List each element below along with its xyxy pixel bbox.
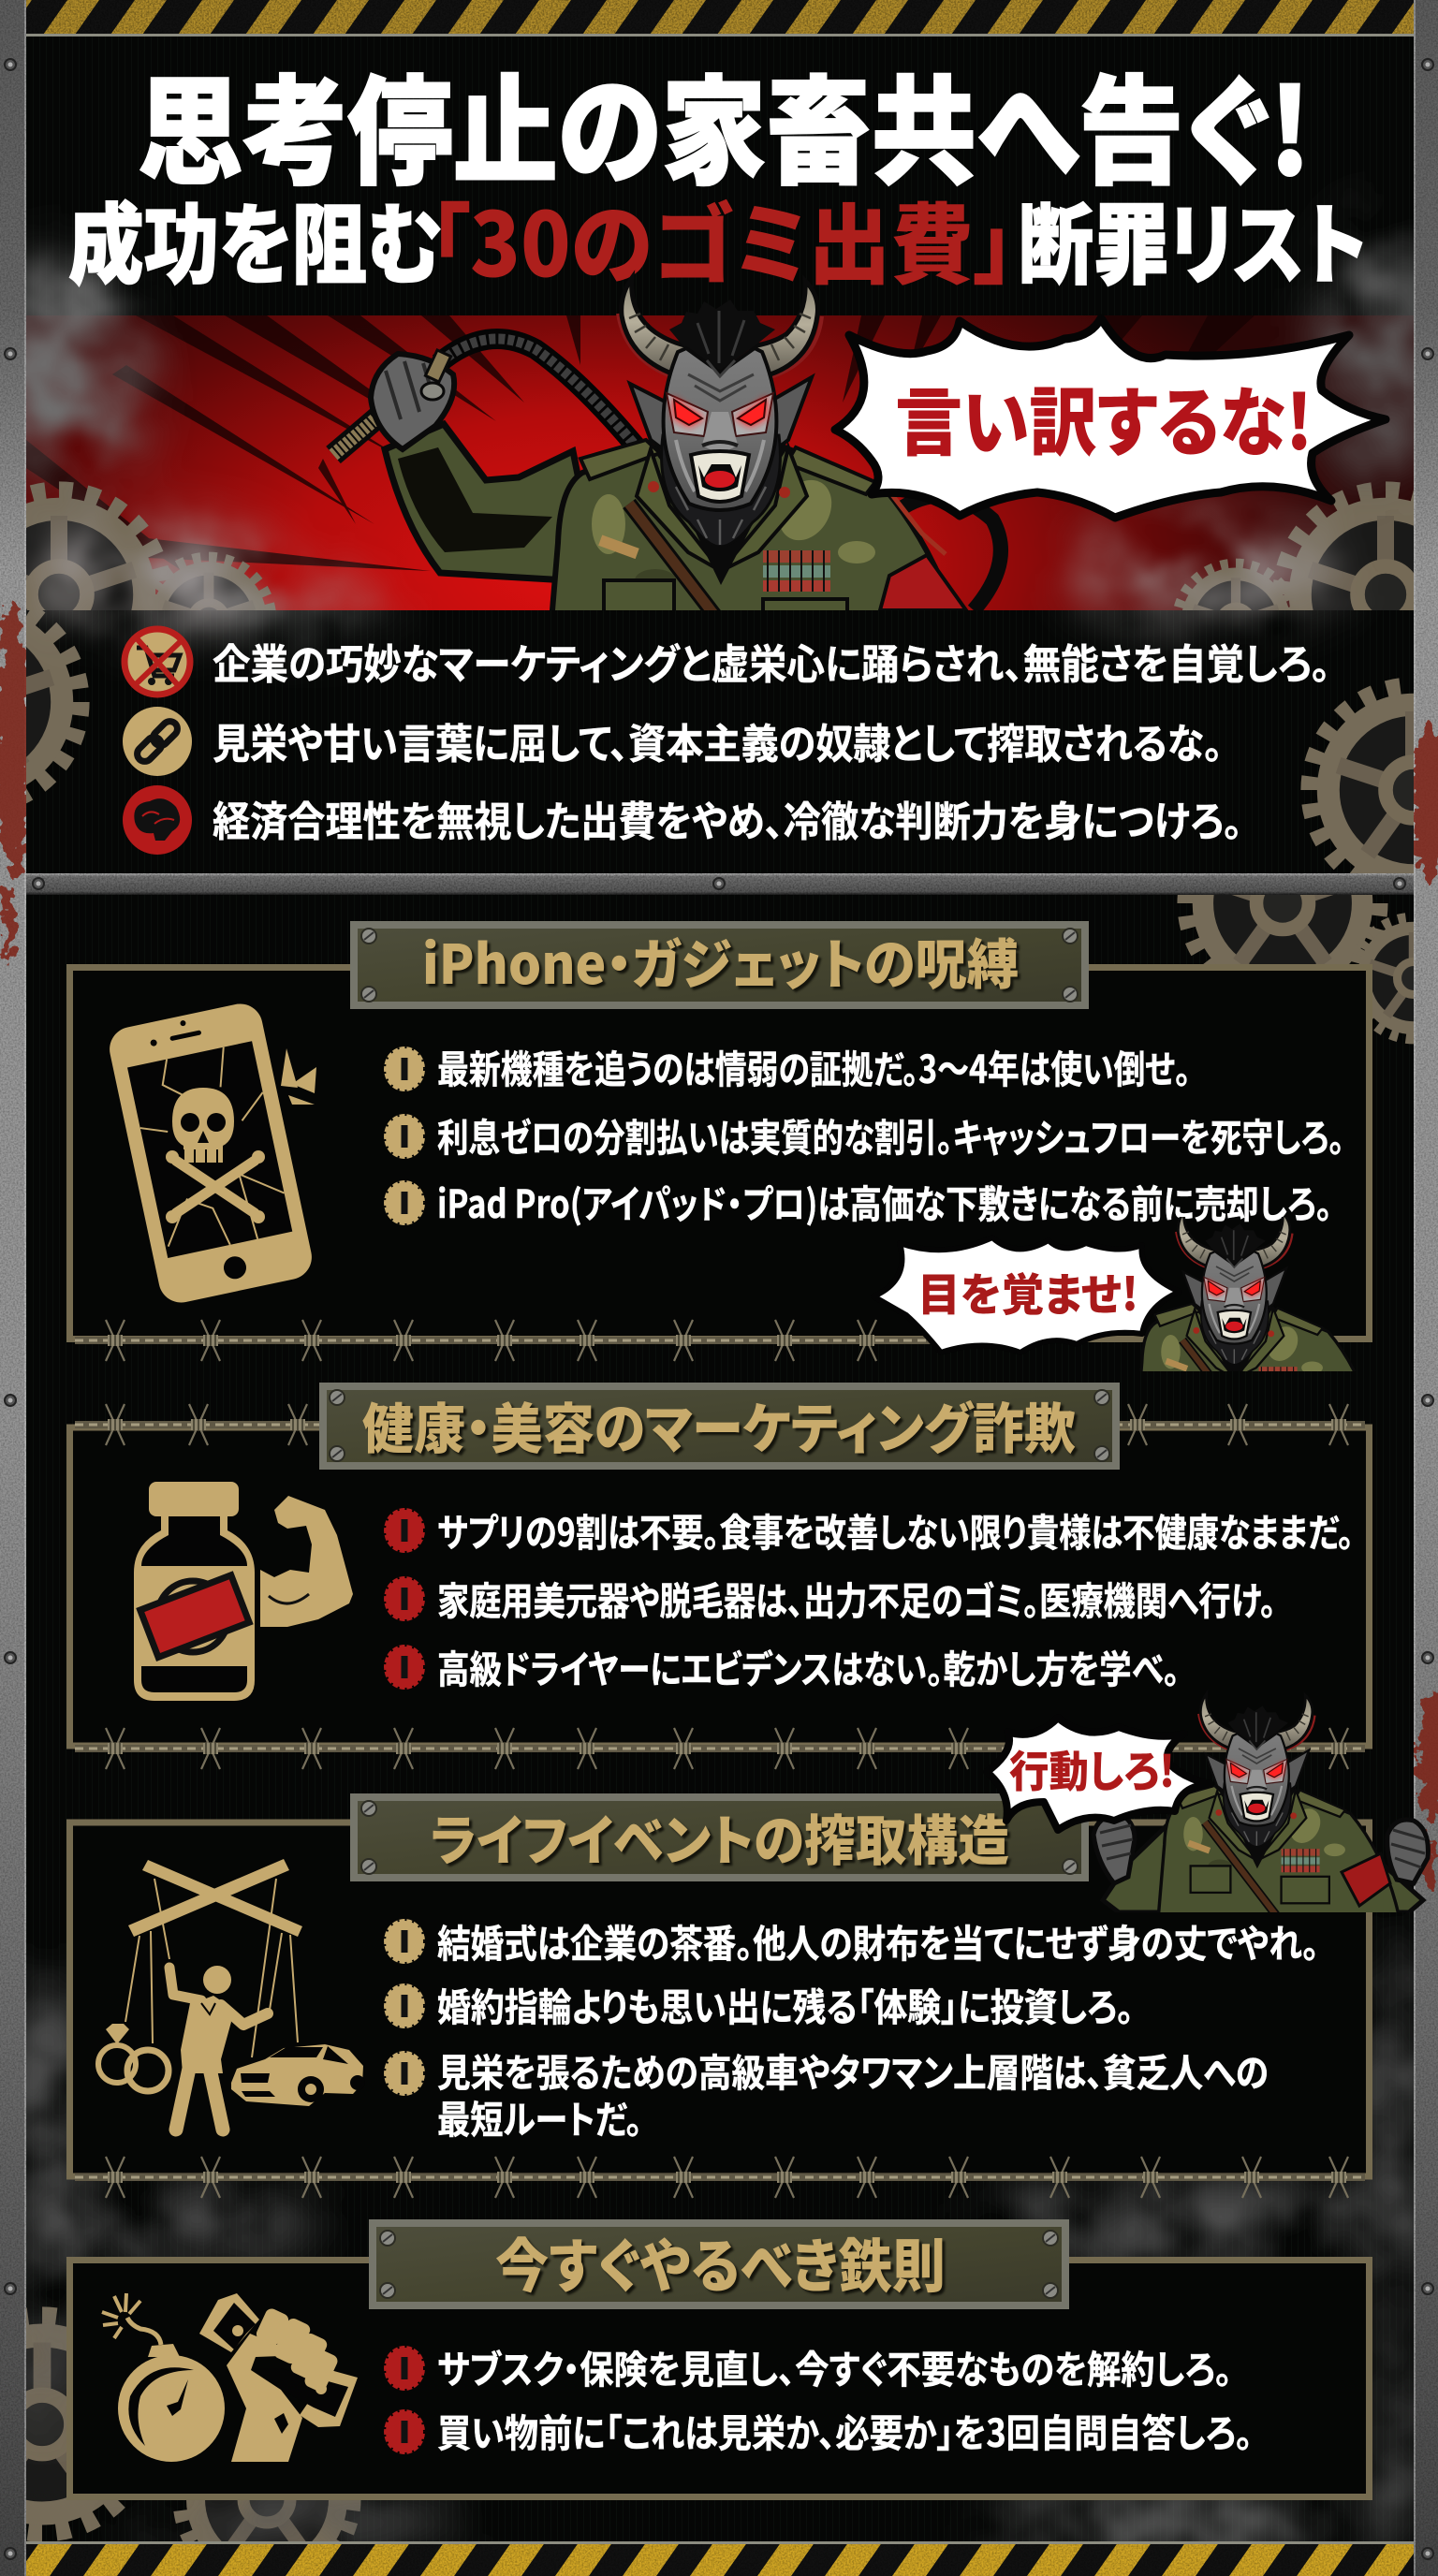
heading plate [323,1385,1116,1466]
bullet list [384,1038,1344,1229]
icon: marionette with ring and car [98,1859,365,2130]
body [1158,1786,1399,1915]
title [68,38,1367,302]
bullet list [384,1912,1319,2144]
icon: chain [123,707,192,776]
bullet list: サブスク・保険を見直し、今すぐ不要なものを解約しろ。 [437,2338,1232,2394]
blood splatters [0,599,1438,1891]
icon: bomb and fist with cash [102,2293,358,2462]
gears: lower background [26,895,1414,2541]
gears: header background [26,481,1414,610]
panel: iron rules [69,2219,1369,2497]
bullet list: 高級ドライヤーにエビデンスはない。乾かし方を学べ。 [437,1638,1180,1694]
title: 「30のゴミ出費」 [429,175,1015,302]
frame [69,2260,1369,2497]
arm shadow [398,447,552,552]
whip handle [333,412,384,455]
frame [69,1427,1369,1746]
sleeve highlight [889,491,946,554]
bullet list: 結婚式は企業の茶番。他人の財布を当てにせず身の丈でやれ。 [437,1912,1319,1969]
demon: small with raised fists [1093,1693,1428,1915]
right sleeve [1334,1811,1423,1912]
gears: intro band background [26,610,1414,873]
hazard stripe top [26,0,1414,37]
barbed wire top [75,1404,1365,1445]
title: 思考停止の家畜共へ告ぐ! [138,38,1311,209]
icon: cracked phone with skull [106,1000,316,1307]
bullet list: 買い物前に「これは見栄か、必要か」を3回自問自答しろ。 [437,2402,1253,2458]
demon commander with whip [326,270,1009,610]
barbed wire [75,1320,936,1361]
speech bubble: 目を覚ませ! [873,1237,1180,1353]
intro line 2: 見栄や甘い言葉に屈して、資本主義の奴隷として搾取されるな。 [213,710,1223,770]
armband [880,555,966,610]
title: 断罪リスト [1019,175,1367,302]
heading text: 今すぐやるべき鉄則 [495,2219,946,2304]
hazard stripe bottom [26,2541,1414,2576]
head [1198,1693,1314,1847]
whip tail [899,496,1001,610]
right fist [1387,1820,1428,1883]
panel: header red burst with rays [26,315,1414,610]
raised arm [385,424,599,582]
panel: life events [69,1797,1369,2198]
icon: supplement bottle and flexed arm [134,1482,353,1701]
bullet list [384,1501,1354,1694]
heading text: iPhone・ガジェットの呪縛 [422,921,1019,1000]
whip [439,339,646,459]
bullet list: 最新機種を追うのは情弱の証拠だ。3〜4年は使い倒せ。 [437,1038,1191,1094]
bubble text: 目を覚ませ! [917,1258,1138,1324]
heading plate [354,1797,1085,1878]
bullet list [384,2338,1253,2458]
barbed wire [75,2157,1365,2198]
demon: small, arms cropped [1136,1211,1376,1433]
bullet list: 見栄を張るための高級車やタワマン上層階は、貧乏人への [437,2042,1269,2098]
gloved fist [371,350,454,449]
speech bubble: 行動しろ! [987,1718,1211,1830]
bubble text: 言い訳するな! [895,363,1313,472]
intro line 3: 経済合理性を無視した出費をやめ、冷徹な判断力を身につけろ。 [213,788,1242,848]
frame [69,968,1369,1339]
heading plate [373,2219,1065,2305]
left fist [1093,1813,1135,1883]
bubble text: 行動しろ! [1009,1738,1175,1800]
title: 成功を阻む [68,175,443,302]
frame [69,1822,1369,2176]
armband [1342,1853,1390,1906]
bullet list: 最短ルートだ。 [437,2088,642,2144]
bullet list: 婚約指輪よりも思い出に残る「体験」に投資しろ。 [437,1976,1134,2032]
icon: no shopping cart [125,629,190,695]
speech bubble: 言い訳するな! [835,318,1386,518]
barbed wire bottom [75,1728,1365,1769]
intro line 1: 企業の巧妙なマーケティングと虚栄心に踊らされ、無能さを自覚しろ。 [213,631,1330,691]
head [618,278,822,547]
panel: health and beauty [69,1385,1369,1769]
panel: iPhone gadgets [69,921,1369,1361]
heading plate [354,921,1085,1005]
metal divider [26,873,1414,895]
panel: intro points [123,629,1330,855]
bullet list: 家庭用美元器や脱毛器は、出力不足のゴミ。医療機関へ行け。 [437,1570,1276,1626]
heading text: 健康・美容のマーケティング詐欺 [362,1385,1076,1464]
torso [550,438,940,610]
heading text: ライフイベントの搾取構造 [430,1797,1009,1876]
icon: brain [123,785,192,855]
left sleeve [1103,1811,1189,1912]
